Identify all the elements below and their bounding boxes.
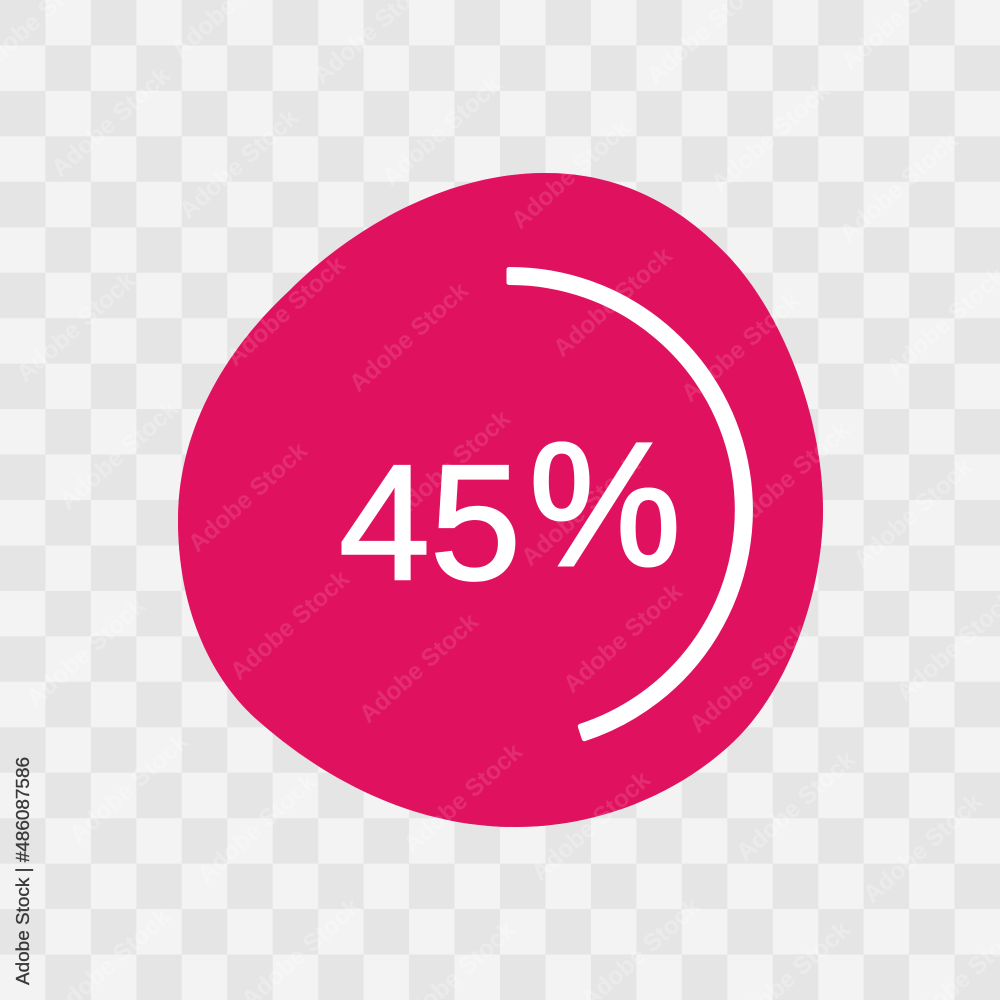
percentage label: % (529, 407, 681, 603)
watermarks: Adobe Stock (398, 738, 528, 859)
watermarks: Adobe Stock (548, 242, 678, 363)
watermarks: Adobe Stock (726, 416, 856, 537)
watermarks: Adobe Stock (174, 104, 304, 225)
watermarks: Adobe Stock (706, 77, 836, 198)
watermarks: Adobe Stock (858, 788, 988, 909)
watermarks: Adobe Stock (386, 405, 516, 526)
percentage label: 45 (339, 431, 521, 614)
watermarks: Adobe Stock (676, 287, 806, 408)
stock id caption: Adobe Stock | #486087586 (13, 757, 33, 985)
watermarks: Adobe Stock (183, 437, 313, 558)
watermarks: Adobe Stock (54, 395, 184, 516)
watermarks: Adobe Stock (731, 746, 861, 867)
watermarks: Adobe Stock (834, 127, 964, 248)
watermarks: Adobe Stock (21, 592, 151, 713)
watermarks: Adobe Stock (344, 277, 474, 398)
watermarks: Adobe Stock (354, 608, 484, 729)
watermarks: Adobe Stock (192, 768, 322, 889)
progress arc 45% (509, 269, 750, 739)
watermarks: Adobe Stock (11, 267, 141, 388)
watermarks: Adobe Stock (225, 565, 355, 686)
pink blob (178, 173, 823, 827)
watermarks: Adobe Stock (377, 71, 507, 192)
watermarks: Adobe Stock (558, 578, 688, 699)
watermarks: Adobe Stock (516, 451, 646, 572)
watermarks: Adobe Stock (64, 728, 194, 849)
watermarks: Adobe Stock (506, 114, 636, 235)
watermarks: Adobe Stock (46, 62, 176, 183)
percentage label (339, 407, 681, 614)
watermarks: Adobe Stock (684, 618, 814, 739)
watermarks: Adobe Stock (848, 453, 978, 574)
watermarks: Adobe Stock (526, 766, 656, 887)
watermarks: Adobe Stock (221, 251, 351, 372)
